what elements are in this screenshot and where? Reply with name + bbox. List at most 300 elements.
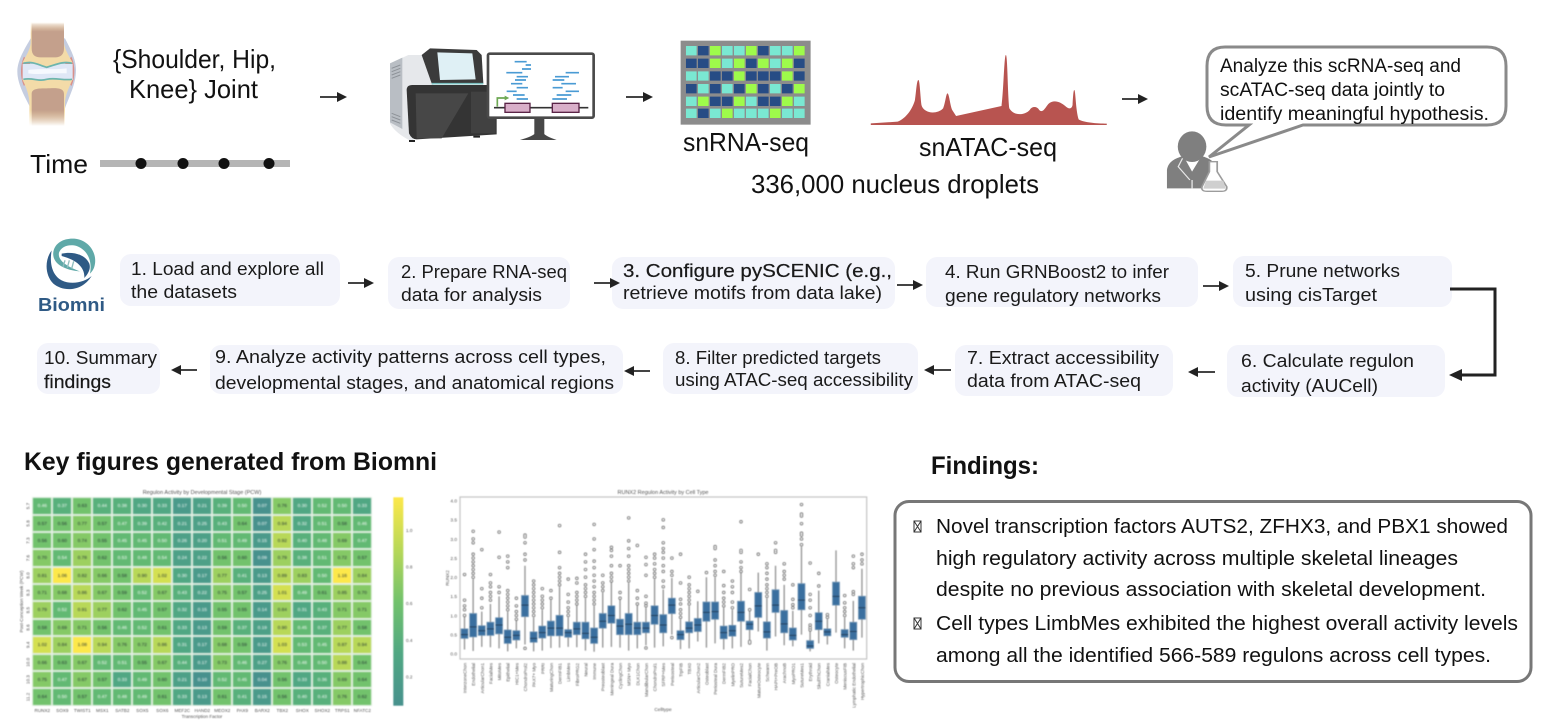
- heatmap cells: 0.47: [58, 678, 67, 683]
- heatmap cells: 0.51: [118, 661, 127, 666]
- bullet icon: [914, 521, 921, 532]
- heatmap cells: 0.75: [38, 678, 47, 683]
- chart: RUNX2 regulon boxplot: Endothelial: [471, 663, 476, 686]
- heatmap cells: 0.54: [58, 556, 67, 561]
- heatmap cells: 0.84: [358, 574, 367, 579]
- heatmap cells: 0.19: [258, 626, 267, 631]
- panel: findings: [895, 502, 1531, 682]
- heatmap axes and colorbar: NFATC2: [354, 708, 371, 713]
- heatmap cells: 0.59: [238, 643, 247, 648]
- heatmap axes and colorbar: MSX1: [96, 708, 109, 713]
- heatmap cells: 0.31: [298, 608, 307, 613]
- heatmap cells: 0.57: [98, 678, 107, 683]
- heatmap cells: 1.03: [278, 643, 287, 648]
- callout: analysis prompt: identify meaningful hypothesis.: [1220, 104, 1489, 125]
- heatmap cells: 0.41: [238, 574, 247, 579]
- heatmap cells: 0.67: [98, 591, 107, 596]
- heatmap cells: 0.61: [158, 695, 167, 700]
- chart: RUNX2 regulon boxplot: 2.5: [450, 556, 457, 562]
- heatmap cells: 0.61: [218, 695, 227, 700]
- heatmap cells: 0.17: [198, 661, 207, 666]
- heatmap cells: 0.53: [298, 643, 307, 648]
- heatmap cells: 0.07: [258, 522, 267, 527]
- step 9: 9. Analyze activity patterns across cell types,: [215, 347, 606, 367]
- chart: RUNX2 regulon boxplot: MatureOsteocyte: [756, 663, 761, 698]
- heatmap cells: 0.25: [198, 522, 207, 527]
- heatmap cells: 0.30: [298, 504, 307, 509]
- label: snATAC-seq: snATAC-seq: [919, 132, 1057, 162]
- heatmap cells: 0.07: [258, 504, 267, 509]
- chart: RUNX2 regulon boxplot: MyelinPRO: [730, 663, 735, 686]
- heatmap cells: 0.59: [118, 591, 127, 596]
- heatmap cells: 0.33: [118, 678, 127, 683]
- heatmap cells: 0.43: [218, 522, 227, 527]
- heatmap cells: 0.48: [118, 695, 127, 700]
- heatmap axes and colorbar: 8.5: [26, 607, 30, 613]
- heatmap cells: 0.46: [118, 626, 127, 631]
- heatmap cells: 0.56: [278, 678, 287, 683]
- heatmap cells: 0.52: [218, 678, 227, 683]
- arrow: step 3 to 4: [897, 280, 923, 290]
- heatmap axes and colorbar: 0.6: [406, 601, 413, 606]
- heatmap cells: 1.02: [158, 574, 167, 579]
- heatmap cells: 0.48: [138, 556, 147, 561]
- heatmap cells: 0.40: [298, 695, 307, 700]
- heatmap cells: 0.25: [258, 591, 267, 596]
- step 3: retrieve motifs from data lake): [623, 283, 882, 303]
- chart: RUNX2 regulon boxplot: CyclingChon: [618, 663, 623, 689]
- heatmap cells: 0.82: [78, 574, 87, 579]
- heatmap cells: 0.86: [158, 643, 167, 648]
- chart: RUNX2 regulon boxplot: InterzoneChon: [462, 663, 468, 693]
- step 2: data for analysis: [401, 285, 542, 305]
- heatmap cells: 0.42: [158, 522, 167, 527]
- chart: RUNX2 regulon boxplot: 1.5: [450, 594, 457, 600]
- heatmap axes and colorbar: 1.0: [406, 528, 413, 533]
- heatmap cells: 0.69: [58, 626, 67, 631]
- chart: RUNX2 regulon boxplot: RUNX2: [445, 570, 450, 586]
- heatmap cells: 0.43: [178, 591, 187, 596]
- heatmap cells: 0.57: [238, 591, 247, 596]
- heatmap cells: 0.78: [78, 556, 87, 561]
- chart: RUNX2 regulon boxplot: 3.0: [450, 537, 457, 543]
- step 6: activity (AUCell): [1241, 376, 1378, 396]
- chart: RUNX2 regulon boxplot: 3.5: [450, 518, 457, 524]
- heatmap cells: 0.13: [258, 574, 267, 579]
- heading: key figures: Key figures generated from Biomni: [24, 448, 437, 476]
- step 2: 2. Prepare RNA-seq: [401, 262, 567, 282]
- heatmap cells: 0.67: [158, 591, 167, 596]
- heatmap cells: 0.79: [38, 608, 47, 613]
- chart: RUNX2 regulon boxplot: SutureMes2: [739, 663, 744, 688]
- heatmap cells: 0.71: [338, 608, 347, 613]
- heatmap axes and colorbar: HAND2: [195, 708, 211, 713]
- arrow: step 5 to 6 connector: [1449, 289, 1495, 381]
- chart: RUNX2 regulon boxplot: Celltype: [654, 707, 672, 713]
- heatmap cells: 0.67: [78, 661, 87, 666]
- heatmap cells: 0.71: [38, 591, 47, 596]
- heatmap cells: 0.57: [358, 556, 367, 561]
- heatmap axes and colorbar: 11.2: [26, 692, 30, 701]
- heatmap cells: 0.10: [198, 678, 207, 683]
- heatmap cells: 0.58: [338, 522, 347, 527]
- heatmap cells: 0.50: [318, 574, 327, 579]
- heatmap cells: 0.12: [258, 643, 267, 648]
- heatmap cells: 0.55: [138, 661, 147, 666]
- heatmap cells: 0.40: [298, 539, 307, 544]
- label: time: Time: [30, 149, 88, 179]
- chart: RUNX2 regulon boxplot: PAX7+ Myo: [532, 663, 537, 687]
- heatmap axes and colorbar: 10.0: [26, 657, 30, 667]
- arrow: step 7 to 8: [924, 365, 951, 375]
- arrow: step 2 to 3: [594, 278, 620, 288]
- heatmap cells: 0.47: [118, 522, 127, 527]
- heatmap cells: 0.70: [38, 556, 47, 561]
- heatmap cells: 0.64: [358, 661, 367, 666]
- chart: RUNX2 regulon boxplot: 0.0: [450, 652, 457, 658]
- arrow: joint to sequencer: [320, 92, 347, 102]
- heatmap cells: 0.39: [138, 522, 147, 527]
- heatmap cells: 0.13: [198, 626, 207, 631]
- heatmap cells: 0.50: [318, 661, 327, 666]
- heatmap cells: 0.46: [238, 661, 247, 666]
- heatmap cells: 0.45: [238, 678, 247, 683]
- heatmap cells: 0.60: [158, 678, 167, 683]
- heading: joint label: [113, 44, 276, 104]
- heatmap cells: 0.63: [58, 661, 67, 666]
- heatmap cells: 0.45: [138, 608, 147, 613]
- chart: RUNX2 regulon boxplot: Epithelial: [506, 663, 511, 682]
- heatmap cells: 0.46: [38, 504, 47, 509]
- heatmap cells: 0.73: [218, 661, 227, 666]
- heatmap cells: 0.21: [178, 678, 187, 683]
- step 5: [1233, 256, 1452, 307]
- step 6: 6. Calculate regulon: [1241, 351, 1414, 371]
- heatmap cells: 0.26: [178, 539, 187, 544]
- heatmap cells: 0.22: [198, 556, 207, 561]
- step 7: [955, 345, 1173, 396]
- step 2: [388, 257, 570, 309]
- heatmap cells: 0.33: [178, 626, 187, 631]
- step 9: [210, 345, 623, 394]
- heading: joint label: {Shoulder, Hip,: [113, 44, 276, 74]
- chart: RUNX2 regulon boxplot: SkullThChon: [817, 663, 822, 689]
- arrow: step 6 to 7: [1188, 367, 1215, 377]
- icon: monitor with reads: [488, 54, 594, 140]
- chart: RUNX2 regulon boxplot: Osteocyte: [834, 663, 839, 684]
- heatmap cells: 0.89: [278, 574, 287, 579]
- heatmap axes and colorbar: SHOX2: [315, 708, 331, 713]
- callout: analysis prompt: scATAC-seq data jointly to: [1220, 80, 1445, 101]
- heatmap cells: 0.94: [278, 522, 287, 527]
- heatmap cells: 0.57: [78, 695, 87, 700]
- heatmap cells: 0.85: [338, 591, 347, 596]
- heatmap cells: 0.47: [358, 539, 367, 544]
- chart: RUNX2 regulon boxplot: DermFIB1: [558, 663, 562, 684]
- chart: RUNX2 regulon boxplot: Periosteal Dura: [713, 663, 718, 695]
- chart: RUNX2 regulon boxplot: Meningeal Dura: [609, 663, 614, 695]
- heatmap cells: 0.56: [218, 556, 227, 561]
- chart: RUNX2 regulon boxplot: HAPI+PreOB: [774, 663, 778, 690]
- chart: RUNX2 regulon boxplot: 4.0: [450, 498, 457, 504]
- heatmap axes and colorbar: 9.4: [26, 641, 30, 648]
- heatmap cells: 0.60: [58, 539, 67, 544]
- icon: sequencer: [390, 48, 497, 142]
- heatmap axes and colorbar: 8.0: [26, 572, 30, 579]
- chart: RUNX2 regulon boxplot: ChondroProl2: [523, 663, 528, 691]
- heatmap cells: 0.51: [218, 539, 227, 544]
- chart: RUNX2 regulon boxplot: 0.5: [450, 632, 457, 638]
- heatmap cells: 0.58: [118, 574, 127, 579]
- heatmap cells: 0.15: [258, 695, 267, 700]
- chart: RUNX2 regulon boxplot: FacialChon: [748, 663, 753, 686]
- chart: RUNX2 regulon boxplot: Neural: [584, 663, 588, 677]
- chart: RUNX2 regulon boxplot: ArachnoB: [782, 663, 787, 683]
- heatmap cells: 0.91: [78, 608, 87, 613]
- heatmap cells: 0.17: [178, 504, 187, 509]
- heatmap cells: 0.37: [238, 626, 247, 631]
- chart: RUNX2 regulon boxplot: 2.0: [450, 575, 457, 581]
- heatmap cells: 0.59: [218, 626, 227, 631]
- heatmap cells: 0.81: [38, 574, 47, 579]
- heatmap cells: 0.72: [138, 643, 147, 648]
- heatmap axes and colorbar: TRPS1: [335, 708, 350, 713]
- heatmap cells: 0.51: [318, 522, 327, 527]
- heatmap axes and colorbar: SOX6: [156, 708, 169, 713]
- heatmap cells: 0.56: [58, 522, 67, 527]
- icon: snRNA-seq matrix: [681, 41, 811, 125]
- step 8: 8. Filter predicted targets: [675, 348, 881, 368]
- chart: RUNX2 regulon boxplot: ChondroProl1: [653, 663, 658, 691]
- chart: RUNX2 regulon boxplot: SutureMes1: [800, 663, 804, 688]
- heatmap cells: 1.02: [38, 643, 47, 648]
- finding: cell types: Cell types LimbMes exhibited the highest overall activity levels: [936, 613, 1518, 635]
- step 9: developmental stages, and anatomical regions: [215, 373, 614, 393]
- heatmap axes and colorbar: 8.3: [26, 589, 30, 596]
- heatmap cells: 0.63: [78, 504, 87, 509]
- heatmap cells: 0.53: [118, 556, 127, 561]
- heatmap cells: 0.49: [138, 678, 147, 683]
- heatmap cells: 0.67: [158, 661, 167, 666]
- heatmap cells: 0.67: [78, 678, 87, 683]
- step 3: 3. Configure pySCENIC (e.g.,: [623, 261, 892, 281]
- heatmap axes and colorbar: RUNX2: [35, 708, 51, 713]
- heatmap cells: 0.71: [78, 626, 87, 631]
- chart: RUNX2 regulon boxplot: MaturingChon: [549, 663, 554, 692]
- heatmap cells: 0.15: [258, 539, 267, 544]
- arrow: data to scientist: [1122, 94, 1148, 104]
- heatmap cells: 0.09: [258, 556, 267, 561]
- heatmap cells: 0.64: [358, 678, 367, 683]
- heatmap cells: 0.75: [218, 591, 227, 596]
- heading: findings: Findings:: [931, 452, 1039, 480]
- chart: RUNX2 regulon boxplot: CranialMes: [825, 662, 830, 686]
- step 1: the datasets: [131, 282, 237, 302]
- chart: RUNX2 regulon boxplot: MSN+ Myo: [627, 663, 632, 686]
- label: snRNA-seq: snRNA-seq: [683, 127, 809, 157]
- heatmap cells: 0.38: [298, 556, 307, 561]
- chart: RUNX2 regulon boxplot: PRRI: [540, 663, 545, 674]
- heatmap cells: 1.08: [78, 643, 87, 648]
- heatmap cells: 0.49: [138, 695, 147, 700]
- heatmap cells: 0.38: [118, 504, 127, 509]
- heatmap cells: 0.37: [58, 504, 67, 509]
- heatmap cells: 0.17: [198, 574, 207, 579]
- heatmap cells: 0.76: [118, 643, 127, 648]
- heatmap axes and colorbar: 7.6: [26, 554, 30, 561]
- heatmap cells: 0.61: [318, 591, 327, 596]
- heatmap cells: 0.88: [338, 661, 347, 666]
- chart: RUNX2 regulon boxplot: Erythroid: [808, 663, 813, 681]
- callout: analysis prompt: Analyze this scRNA-seq and: [1220, 56, 1461, 77]
- heatmap cells: 0.94: [358, 643, 367, 648]
- heatmap cells: 1.06: [58, 574, 67, 579]
- heatmap cells: 0.69: [338, 539, 347, 544]
- heatmap cells: 0.94: [98, 643, 107, 648]
- label: droplet count: 336,000 nucleus droplets: [751, 169, 1039, 199]
- heatmap axes and colorbar: 0.4: [406, 638, 413, 643]
- heatmap cells: 0.41: [238, 695, 247, 700]
- chart: RUNX2 regulon boxplot: ArticularChon2: [696, 663, 701, 693]
- heatmap cells: 0.60: [238, 556, 247, 561]
- heatmap cells: 0.77: [78, 522, 87, 527]
- step 1: 1. Load and explore all: [131, 259, 324, 279]
- heatmap cells: 0.04: [258, 678, 267, 683]
- heatmap cells: 0.72: [338, 556, 347, 561]
- heatmap cells: 0.43: [318, 608, 327, 613]
- heatmap cells: 0.57: [38, 522, 47, 527]
- heatmap cells: 0.64: [238, 522, 247, 527]
- heatmap cells: 0.90: [278, 626, 287, 631]
- heatmap cells: 0.49: [238, 539, 247, 544]
- chart: RUNX2 regulon boxplot: 1.0: [450, 613, 457, 619]
- heatmap cells: 0.32: [298, 522, 307, 527]
- step 1: [120, 254, 340, 306]
- heatmap cells: 0.50: [338, 504, 347, 509]
- heatmap cells: 0.62: [118, 608, 127, 613]
- heatmap cells: 0.86: [78, 591, 87, 596]
- heatmap cells: 0.84: [278, 608, 287, 613]
- chart: RUNX2 regulon boxplot: ArticularChon1: [480, 663, 485, 693]
- heatmap cells: 0.62: [98, 556, 107, 561]
- heatmap axes and colorbar: TBX2: [277, 708, 288, 713]
- heatmap cells: 0.76: [278, 661, 287, 666]
- chart: RUNX2 regulon boxplot: MeniscusFIB: [843, 663, 848, 690]
- chart: RUNX2 regulon boxplot: HypertrophicChon: [860, 663, 865, 700]
- heatmap cells: 0.15: [198, 608, 207, 613]
- bullet icon: [914, 618, 921, 629]
- heatmap cells: 0.49: [298, 591, 307, 596]
- heatmap axes and colorbar: TWIST1: [74, 708, 91, 713]
- heatmap cells: 0.45: [298, 626, 307, 631]
- heatmap cells: 0.14: [258, 608, 267, 613]
- heatmap cells: 0.50: [158, 539, 167, 544]
- heatmap cells: 0.58: [358, 626, 367, 631]
- heatmap cells: 0.50: [238, 504, 247, 509]
- heatmap cells: 0.33: [178, 695, 187, 700]
- step 10: [37, 343, 160, 394]
- heatmap cells: 0.56: [38, 539, 47, 544]
- heatmap cells: 0.77: [218, 574, 227, 579]
- heatmap axes and colorbar: 0.2: [406, 674, 413, 680]
- finding: cell types: among all the identified 566-589 regulons across cell types.: [936, 645, 1491, 667]
- heatmap cells: 0.36: [318, 678, 327, 683]
- heading: joint label: Knee} Joint: [129, 74, 259, 104]
- heatmap cells: 0.68: [58, 591, 67, 596]
- arrow: step 8 to 9: [624, 366, 650, 376]
- heatmap cells: 0.90: [138, 574, 147, 579]
- arrow: step 1 to 2: [348, 278, 374, 288]
- heatmap cells: 0.47: [98, 695, 107, 700]
- chart: RUNX2 regulon boxplot: Perisosteal: [670, 663, 675, 686]
- heatmap cells: 0.44: [178, 661, 187, 666]
- chart: RUNX2 regulon boxplot: FibroPRG2: [575, 663, 580, 686]
- heatmap cells: 0.62: [358, 695, 367, 700]
- heatmap cells: 0.13: [198, 695, 207, 700]
- chart: RUNX2 regulon boxplot: MitoMes: [497, 662, 502, 680]
- heatmap cells: 0.21: [178, 522, 187, 527]
- chart: RUNX2 regulon boxplot: Preosteoblast: [601, 662, 606, 691]
- finding: novel transcription factors: despite no previous association with skeletal development.: [936, 579, 1486, 601]
- step 4: [926, 257, 1198, 307]
- arrow: step 4 to 5: [1203, 281, 1229, 291]
- heatmap cells: 0.79: [278, 556, 287, 561]
- heatmap axes and colorbar: Post-Conception Week (PCW): [19, 570, 24, 632]
- heatmap cells: 0.48: [318, 539, 327, 544]
- chart: RUNX2 regulon boxplot: HIC1+Mes: [514, 662, 519, 685]
- chart: RUNX2 regulon boxplot: MyoPRO1: [791, 663, 796, 684]
- heatmap cells: 0.55: [238, 608, 247, 613]
- chart: RUNX2 regulon boxplot: Schwann: [765, 663, 770, 682]
- step 5: using cisTarget: [1245, 285, 1377, 305]
- heatmap cells: 0.66: [98, 574, 107, 579]
- heatmap axes and colorbar: BARX2: [255, 708, 270, 713]
- heatmap axes and colorbar: PAX9: [237, 708, 248, 713]
- heatmap cells: 0.55: [218, 608, 227, 613]
- heatmap cells: 0.84: [58, 643, 67, 648]
- heatmap cells: 0.52: [318, 504, 327, 509]
- heatmap axes and colorbar: Regulon Activity by Developmental Stage (PCW): [143, 490, 261, 496]
- heatmap cells: 0.45: [138, 539, 147, 544]
- heatmap cells: 0.22: [198, 591, 207, 596]
- heatmap cells: 1.16: [338, 574, 347, 579]
- logo: Biomni: [38, 239, 105, 315]
- heatmap cells: 0.46: [358, 522, 367, 527]
- chart: RUNX2 regulon boxplot: MandibularChon: [644, 663, 649, 697]
- step 7: data from ATAC-seq: [967, 371, 1141, 391]
- heatmap cells: 0.54: [158, 556, 167, 561]
- step 10: 10. Summary: [44, 348, 157, 368]
- heatmap cells: 0.43: [318, 695, 327, 700]
- heatmap axes and colorbar: 7.3: [26, 537, 30, 544]
- heatmap cells: 0.66: [38, 661, 47, 666]
- heatmap axes and colorbar: 10.3: [26, 675, 30, 684]
- arrow: step 9 to 10: [171, 365, 197, 375]
- heatmap cells: 0.68: [218, 643, 227, 648]
- heatmap cells: 0.52: [58, 608, 67, 613]
- finding: novel transcription factors: Novel transcription factors AUTS2, ZFHX3, and PBX1 showed: [936, 516, 1508, 538]
- chart: RUNX2 regulon boxplot: Osteoblast: [704, 662, 709, 685]
- heatmap cells: 0.87: [338, 643, 347, 648]
- heatmap cells: 0.76: [278, 504, 287, 509]
- arrow: sequencer to data: [626, 92, 653, 102]
- heatmap cells: 0.17: [198, 643, 207, 648]
- heatmap cells: 0.56: [98, 626, 107, 631]
- step 6: [1227, 345, 1445, 397]
- heatmap cells: 0.64: [38, 695, 47, 700]
- logo: Biomni: Biomni: [38, 295, 105, 315]
- heatmap cells: 0.48: [298, 661, 307, 666]
